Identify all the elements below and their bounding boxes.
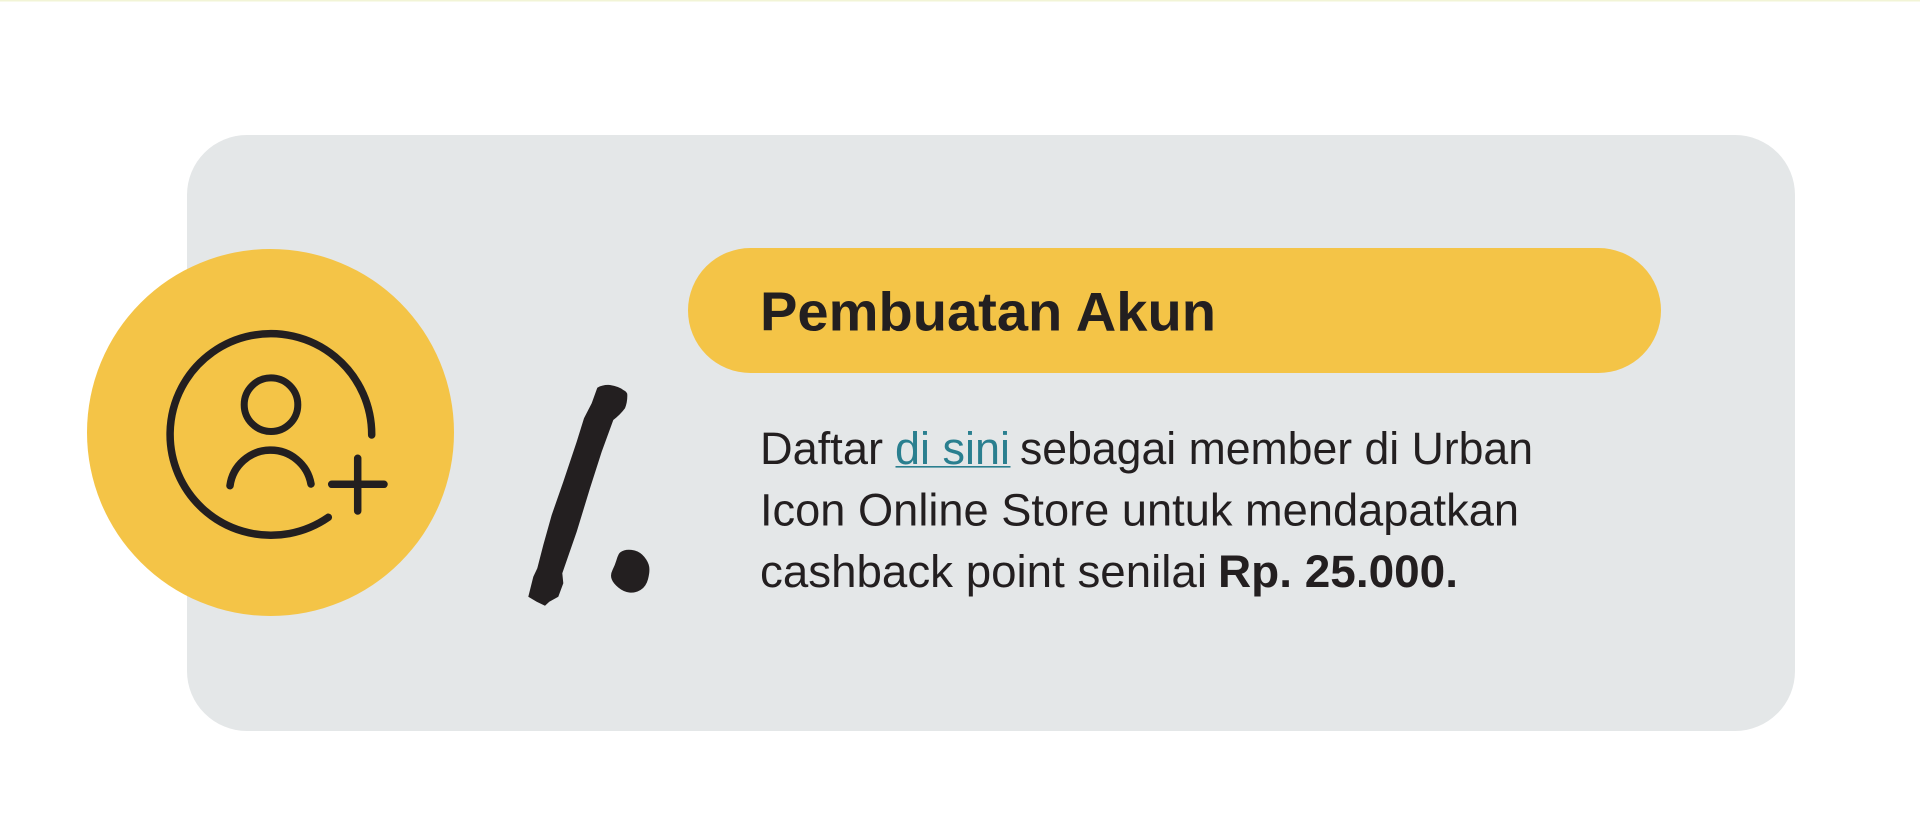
body text: Rp. 25.000. — [1218, 546, 1458, 597]
link: di sini: di sini — [895, 423, 1010, 474]
icon: shoulders — [230, 450, 311, 486]
icon: outer ring — [170, 334, 372, 535]
step number: hand-drawn 1 with dot — [528, 385, 649, 606]
icon: head — [244, 378, 298, 432]
numeral stroke — [528, 385, 627, 606]
yellow circle — [87, 249, 454, 616]
heading: Pembuatan Akun: Pembuatan Akun — [760, 280, 1216, 342]
body text: Icon Online Store untuk mendapatkan — [760, 484, 1519, 536]
panel: background card — [187, 135, 1795, 731]
body text — [760, 423, 1533, 597]
body text: Daftar — [760, 423, 883, 474]
body text: sebagai member di Urban — [1020, 423, 1533, 474]
icon: plus sign — [332, 458, 384, 511]
icon: add user in yellow circle — [87, 249, 454, 616]
body text: cashback point senilai — [760, 546, 1207, 597]
dot — [611, 550, 649, 593]
heading pill — [688, 248, 1661, 373]
